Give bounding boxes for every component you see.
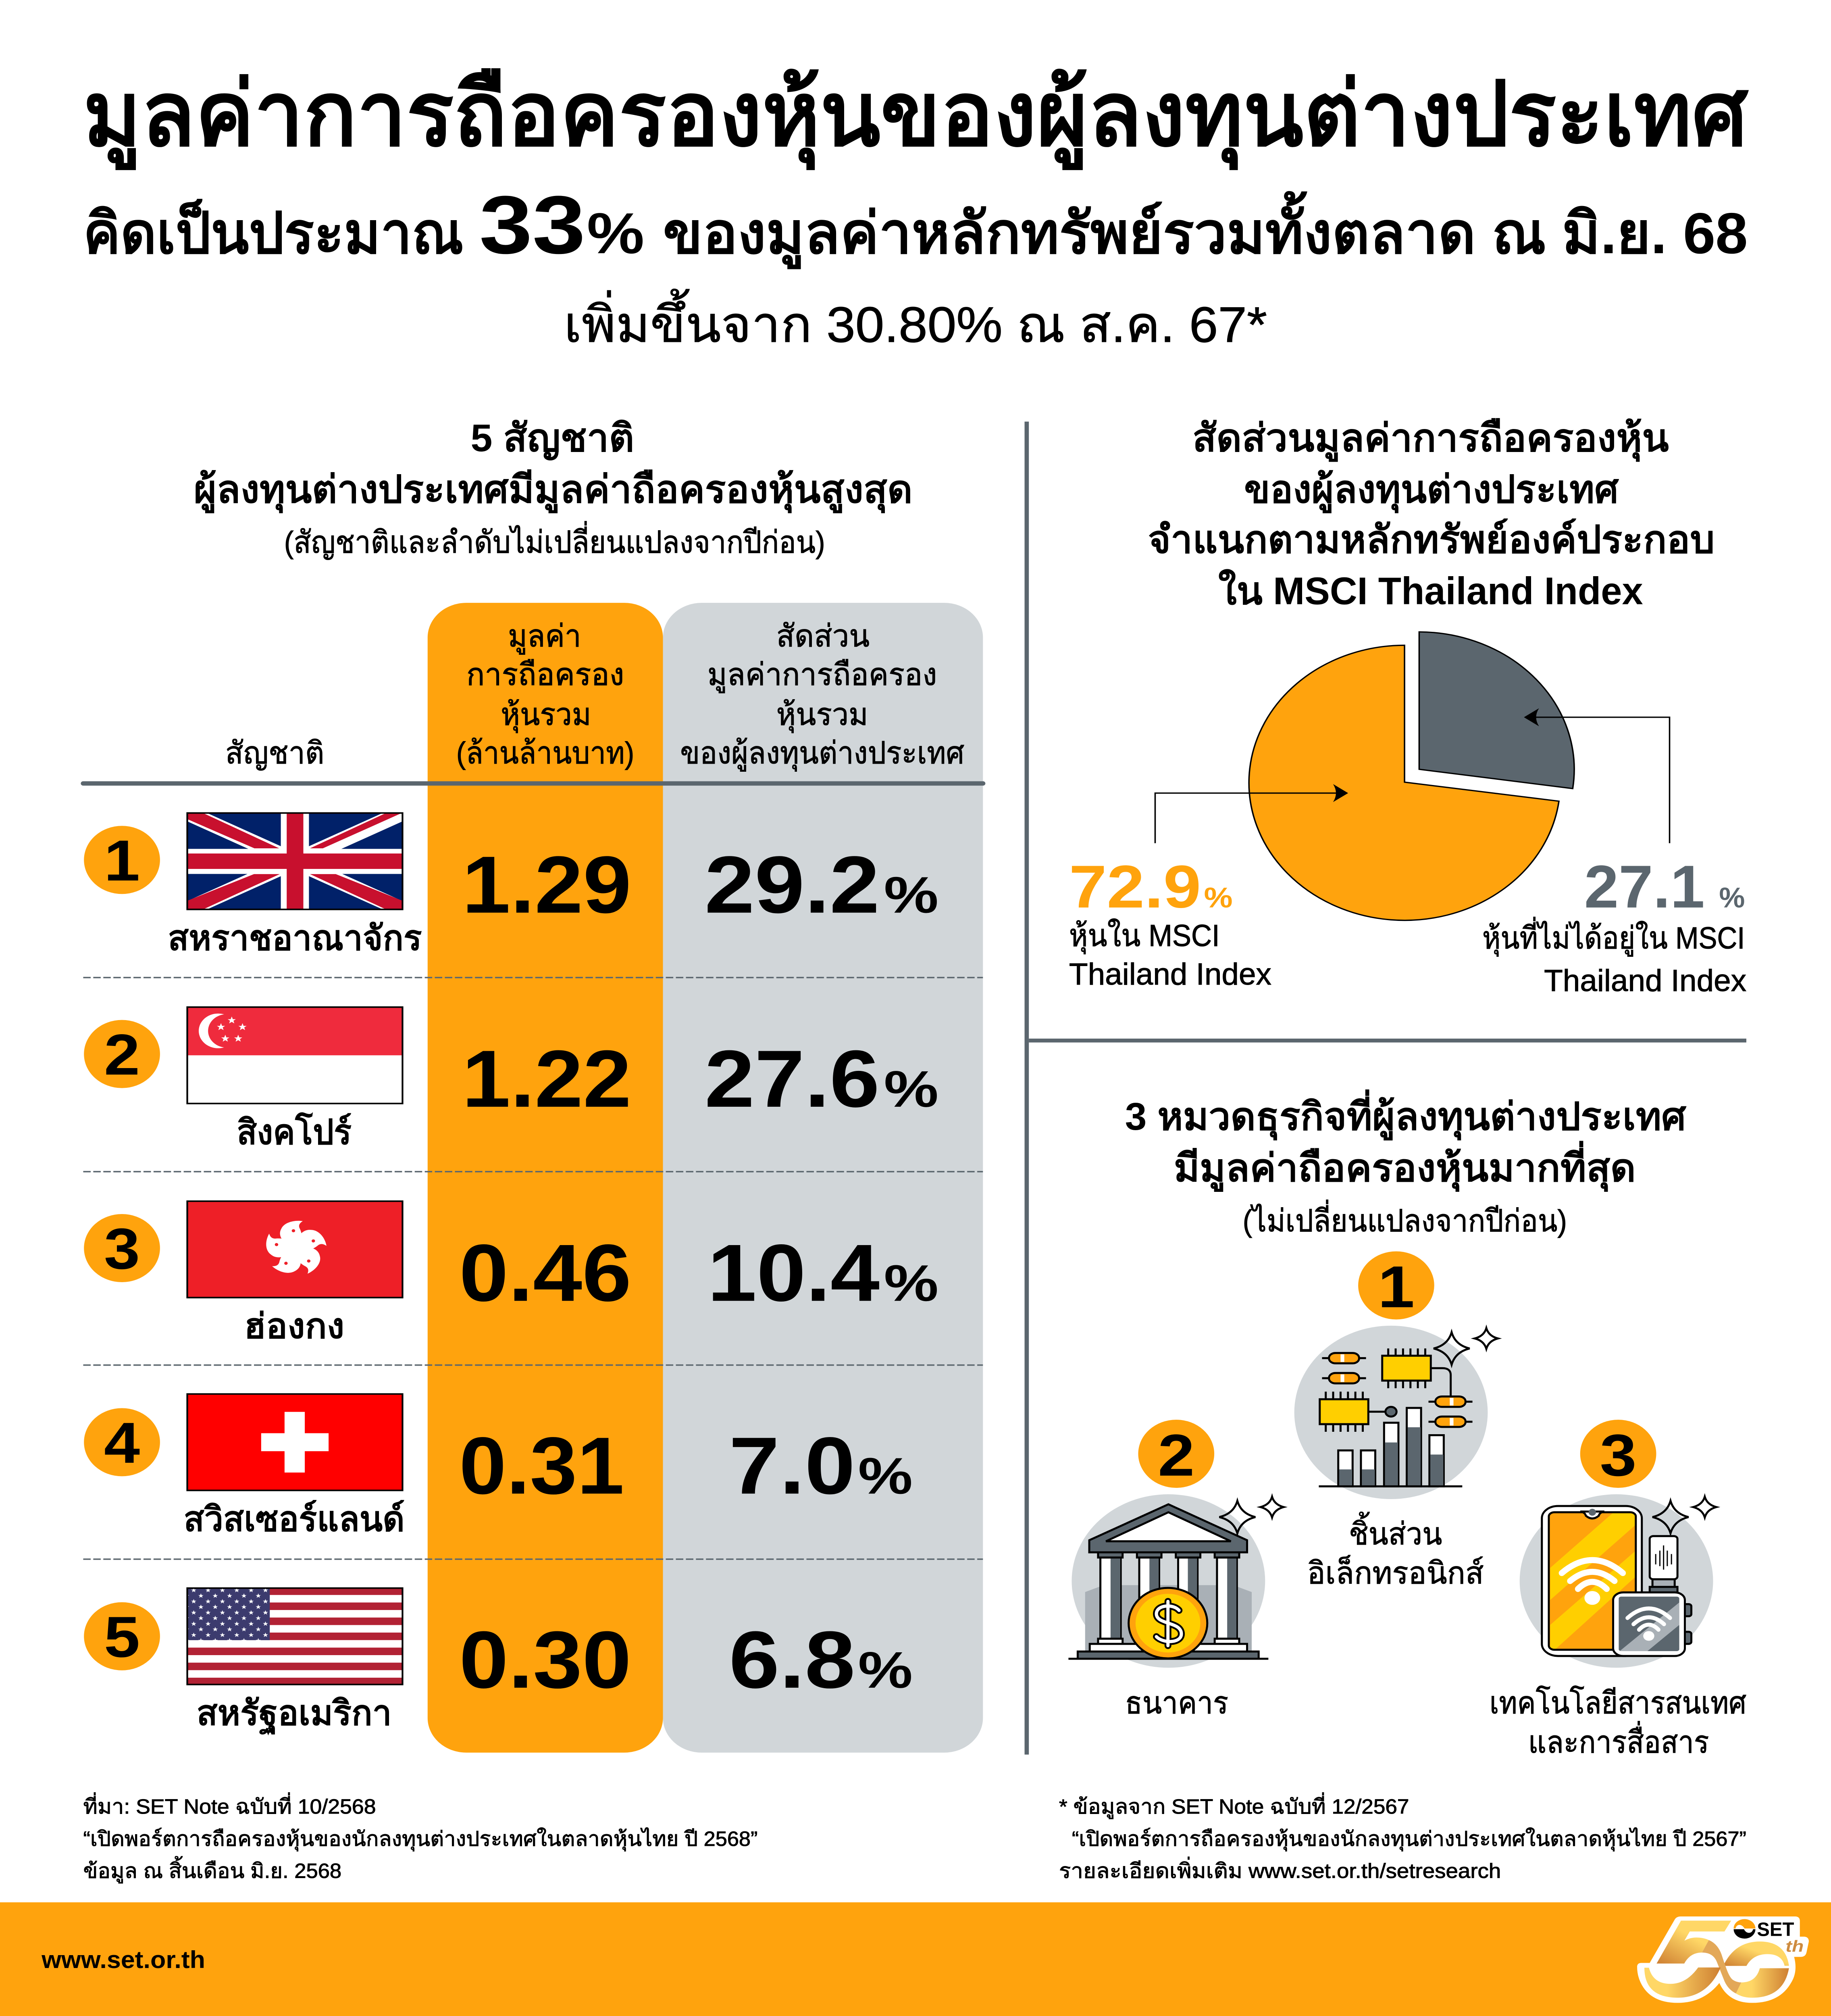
subtitle: คิดเป็นประมาณ [83, 198, 464, 266]
label: in MSCI [1069, 918, 1271, 991]
share: 29.2 [705, 839, 880, 930]
label: ICT [1490, 1685, 1746, 1760]
column header: value [456, 619, 634, 771]
sector 3 badge [1580, 1420, 1656, 1488]
flag: United States [187, 1587, 403, 1685]
share: % [858, 1447, 913, 1505]
column: holding share [663, 603, 983, 1753]
heading: top 5 nationalities: 5 สัญชาติ [471, 417, 634, 461]
rank badge 2: 2 [104, 1023, 140, 1087]
column header: share [680, 619, 964, 772]
sector 2 badge [1138, 1420, 1214, 1488]
icon: smartphone and wifi devices [1520, 1494, 1717, 1668]
column header: share: หุ้นรวม [776, 698, 868, 733]
arrow: in MSCI [1155, 784, 1348, 843]
heading: top 5 nationalities: ผู้ลงทุนต่างประเทศมีมูลค่าถือครองหุ้นสูงสุด [194, 468, 913, 513]
label: electronic components: ชิ้นส่วน [1349, 1512, 1442, 1551]
value: 1.29 [462, 839, 631, 930]
stat: 27.1%: 27.1 [1584, 853, 1705, 921]
share: 10.4 [707, 1228, 880, 1318]
row 2: Singapore [84, 1006, 938, 1152]
subheading: increase from previous: เพิ่มขึ้นจาก 30.80% ณ ส.ค. 67* [564, 289, 1267, 352]
heading: top 5 nationalities: (สัญชาติและลำดับไม่เปลี่ยนแปลงจากปีก่อน) [284, 521, 825, 560]
rank badge 5 [84, 1602, 160, 1670]
share: % [884, 1060, 938, 1118]
share: 27.6 [705, 1034, 880, 1124]
column header: value: การถือครอง [466, 658, 624, 692]
label: in MSCI: Thailand Index [1069, 957, 1271, 991]
rank badge 4 [84, 1408, 160, 1476]
rank badge 1 [84, 826, 160, 894]
footnote: previous report: * ข้อมูลจาก SET Note ฉบับที่ 12/2567 [1059, 1792, 1409, 1819]
footnote: previous report: “เปิดพอร์ตการถือครองหุ้นของนักลงทุนต่างประเทศในตลาดหุ้นไทย ปี 2567” [1072, 1827, 1746, 1851]
column header: value: (ล้านล้านบาท) [456, 736, 634, 771]
heading: top 3 sectors: มีมูลค่าถือครองหุ้นมากที่สุด [1174, 1141, 1636, 1192]
country name: สวิสเซอร์แลนด์ [184, 1500, 405, 1539]
slice: not in MSCI 27.1% [1419, 632, 1574, 789]
rank badge 4: 4 [104, 1411, 140, 1475]
rank badge 5: 5 [104, 1605, 140, 1669]
label: not in MSCI: หุ้นที่ไม่ได้อยู่ใน MSCI [1482, 916, 1745, 957]
country name: สิงคโปร์ [237, 1112, 352, 1152]
footer band [0, 1902, 1831, 2016]
label: bank: ธนาคาร [1125, 1686, 1228, 1720]
label: ICT: เทคโนโลยีสารสนเทศ [1490, 1685, 1746, 1720]
label: in MSCI: หุ้นใน MSCI [1069, 918, 1220, 954]
footnote: source [83, 1792, 757, 1883]
share: 7.0 [729, 1420, 855, 1511]
label: not in MSCI [1482, 916, 1746, 998]
heading: MSCI share: ใน MSCI Thailand Index [1218, 569, 1643, 612]
column: holding value [428, 603, 663, 1753]
share: 6.8 [729, 1615, 855, 1705]
footnote: previous report: รายละเอียดเพิ่มเติม www.set.or.th/setresearch [1059, 1857, 1501, 1883]
sector 1 badge [1358, 1251, 1434, 1320]
share: % [858, 1641, 913, 1699]
country name: สหรัฐอเมริกา [197, 1694, 392, 1736]
footnote: source: “เปิดพอร์ตการถือครองหุ้นของนักลงทุนต่างประเทศในตลาดหุ้นไทย ปี 2568” [83, 1827, 757, 1851]
heading: top 3 sectors: 3 หมวดธุรกิจที่ผู้ลงทุนต่างประเทศ [1125, 1089, 1687, 1141]
share [729, 1615, 913, 1705]
stat: 27.1%: % [1719, 882, 1745, 914]
flag: Hong Kong [187, 1201, 403, 1298]
row 5: United States [84, 1587, 913, 1736]
subtitle: % [587, 201, 644, 266]
logo: SET 50th: SET [1757, 1919, 1794, 1940]
heading: top 3 sectors: (ไม่เปลี่ยนแปลงจากปีก่อน) [1243, 1200, 1567, 1238]
column header: share: สัดส่วน [776, 619, 870, 654]
arrow: not in MSCI [1524, 708, 1670, 843]
heading: MSCI share: สัดส่วนมูลค่าการถือครองหุ้น [1192, 417, 1669, 462]
share: % [884, 1254, 938, 1312]
pie chart [1249, 632, 1574, 921]
rank badge 1: 1 [104, 828, 140, 893]
heading: top 5 nationalities [194, 417, 913, 560]
heading: MSCI share: จำแนกตามหลักทรัพย์องค์ประกอบ [1148, 518, 1715, 561]
sector 2 badge: 2 [1158, 1422, 1194, 1488]
value: 0.31 [459, 1420, 624, 1511]
label: electronic components: อิเล็กทรอนิกส์ [1307, 1555, 1484, 1591]
label: electronic components [1307, 1512, 1484, 1591]
share [729, 1420, 913, 1511]
footnote: source: ที่มา: SET Note ฉบับที่ 10/2568 [83, 1792, 376, 1818]
column header: share: มูลค่าการถือครอง [707, 658, 937, 693]
row 3: Hong Kong [84, 1201, 938, 1346]
heading: MSCI share: ของผู้ลงทุนต่างประเทศ [1244, 468, 1619, 513]
row 1: United Kingdom [84, 809, 938, 958]
value: 1.22 [462, 1034, 631, 1124]
value: 0.46 [459, 1228, 631, 1318]
column header: nationality: สัญชาติ [225, 736, 324, 771]
footer url: www.set.or.th [41, 1946, 205, 1973]
stat: 72.9%: % [1204, 882, 1233, 914]
flag: Switzerland [187, 1393, 403, 1491]
value: 0.30 [459, 1615, 631, 1705]
subtitle [83, 179, 1748, 271]
logo: SET 50th [1637, 1916, 1809, 2003]
icon: electronic components [1294, 1326, 1498, 1499]
row 4: Switzerland [84, 1393, 913, 1539]
rank badge 2 [84, 1020, 160, 1088]
rank badge 3: 3 [104, 1216, 140, 1281]
rank badge 3 [84, 1214, 160, 1282]
heading: MSCI share [1148, 417, 1715, 612]
subtitle: ของมูลค่าหลักทรัพย์รวมทั้งตลาด ณ มิ.ย. 68 [663, 191, 1748, 269]
slice: in MSCI 72.9% [1249, 645, 1559, 921]
column header: value: มูลค่า [508, 619, 581, 654]
sector 3 badge: 3 [1600, 1422, 1637, 1488]
subtitle: 33 [479, 179, 585, 271]
country name: ฮ่องกง [244, 1307, 344, 1346]
label: not in MSCI: Thailand Index [1544, 964, 1746, 998]
share: % [884, 866, 938, 924]
heading: top 3 sectors [1125, 1089, 1687, 1238]
footnote: previous report [1059, 1792, 1746, 1883]
sector 1 badge: 1 [1378, 1254, 1415, 1320]
country name: สหราชอาณาจักร [168, 919, 422, 958]
column header: value: หุ้นรวม [501, 698, 591, 733]
logo: SET 50th: th [1785, 1937, 1804, 1955]
icon: bank [1068, 1494, 1284, 1668]
column header: share: ของผู้ลงทุนต่างประเทศ [680, 736, 964, 772]
label: ICT: และการสื่อสาร [1528, 1721, 1709, 1760]
flag: United Kingdom [186, 812, 404, 910]
footnote: source: ข้อมูล ณ สิ้นเดือน มิ.ย. 2568 [83, 1856, 341, 1883]
flag: Singapore [187, 1006, 403, 1104]
stat: 72.9%: 72.9 [1069, 853, 1201, 921]
